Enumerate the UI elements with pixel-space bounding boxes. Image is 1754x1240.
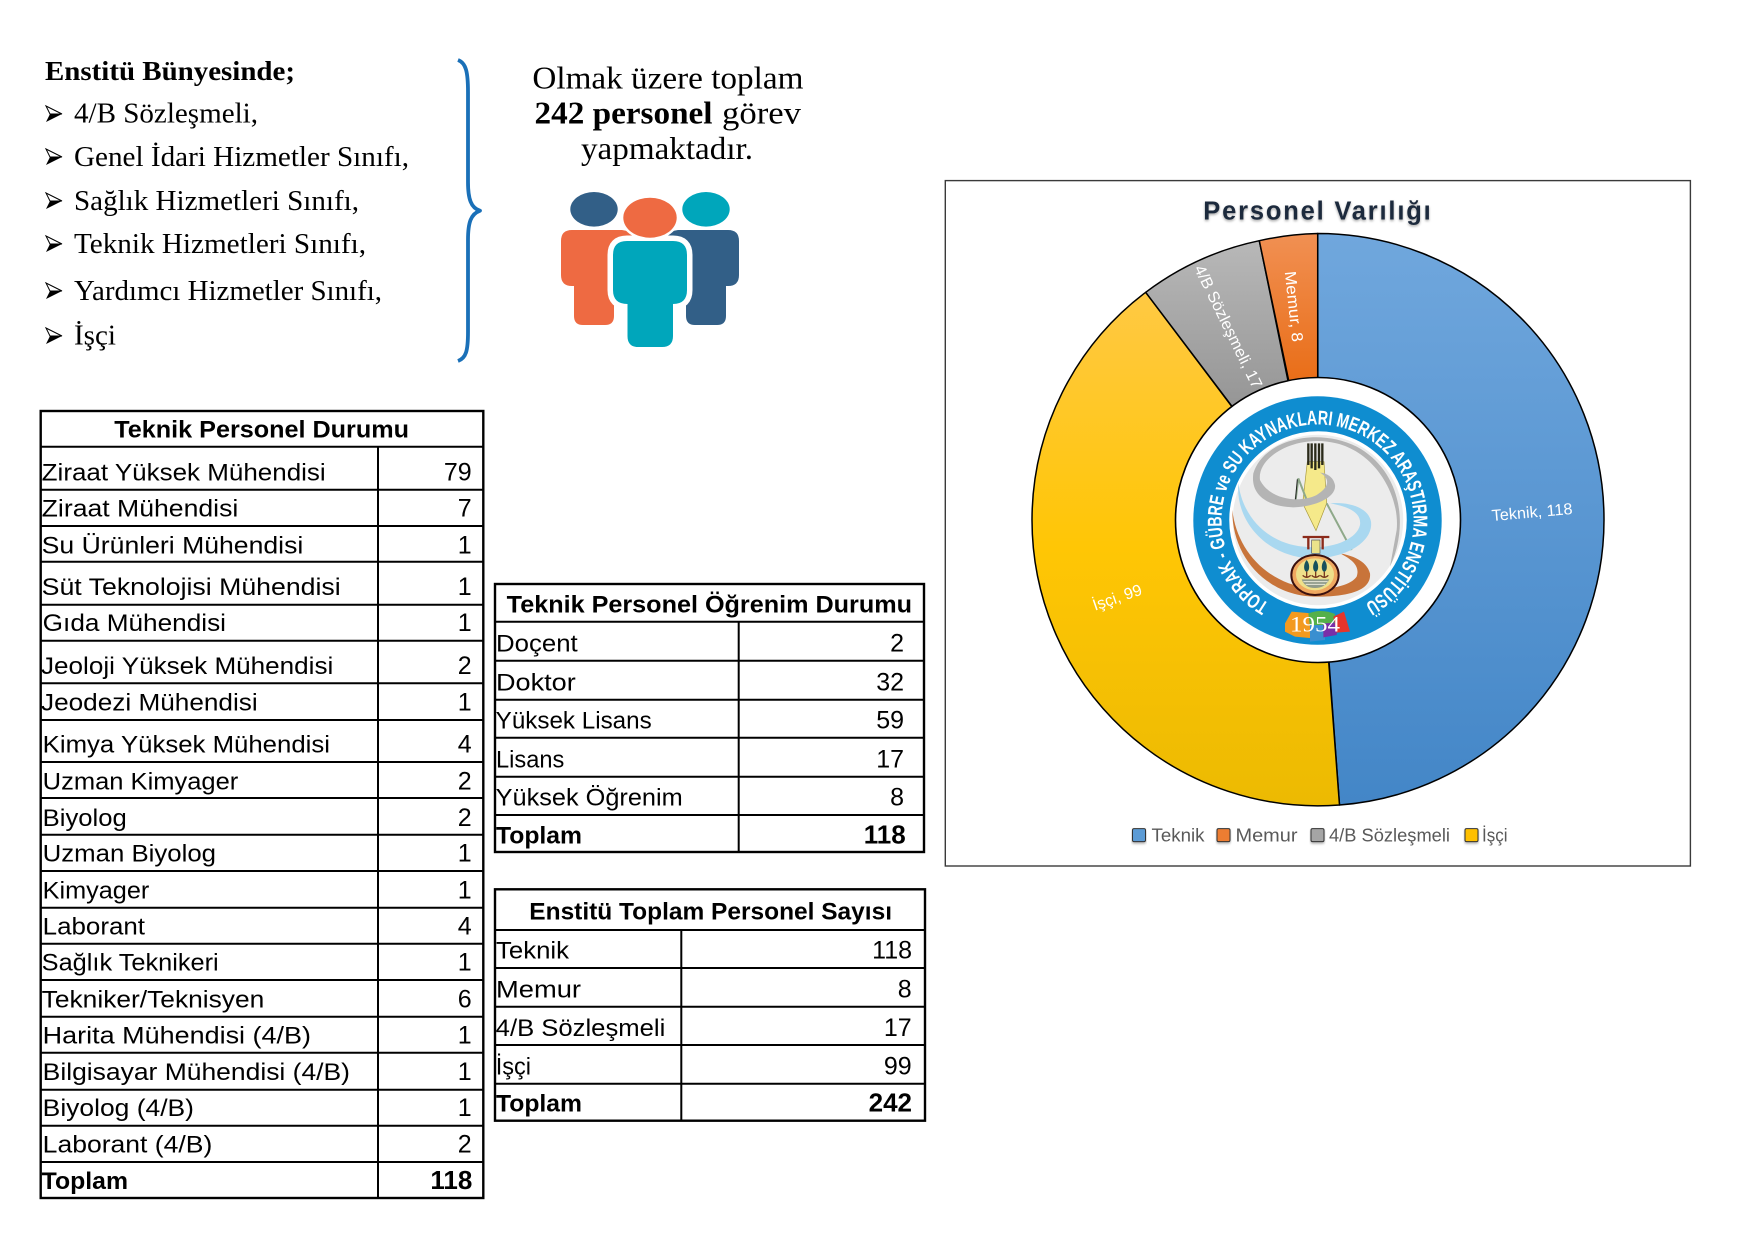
row: Uzman Kimyager: Uzman Kimyager: [43, 768, 238, 795]
row: Bilgisayar Mühendisi (4/B): [43, 1058, 472, 1086]
icon: curly brace: [458, 60, 480, 361]
logo ring text: TOPRAK - GÜBRE ve SU KAYNAKLARI MERKEZ ARAŞTIRMA ENSTİTÜSÜ: [1205, 410, 1428, 618]
list item: Genel İdari Hizmetler Sınıfı: Genel İdari Hizmetler Sınıfı,: [74, 142, 409, 173]
logo: coloured map with 1954: 1954: [1290, 612, 1340, 637]
row: İşçi: 99: [884, 1052, 912, 1080]
row: Kimya Yüksek Mühendisi: [43, 731, 472, 759]
row: Memur: Memur: [496, 977, 581, 1004]
row: Doktor: [496, 669, 904, 697]
row: Tekniker/Teknisyen: Tekniker/Teknisyen: [42, 986, 264, 1013]
row: Ziraat Mühendisi: [42, 495, 472, 523]
data label: Teknik, 118: Teknik, 118: [1491, 501, 1573, 525]
row: Doktor: 32: [876, 669, 904, 697]
row: Lisans: 17: [876, 745, 904, 773]
table: Teknik Personel Durumu: [41, 411, 483, 1198]
row: Laborant (4/B): 2: [458, 1131, 472, 1159]
row: Gıda Mühendisi: [43, 609, 472, 637]
row: Biyolog: [43, 804, 472, 832]
table heading: Teknik Personel Durumu: [114, 416, 409, 443]
row: Toplam: Toplam: [496, 1090, 582, 1118]
row: Lisans: [496, 745, 904, 773]
text block: total personnel statement: [532, 59, 804, 166]
row: Doçent: Doçent: [496, 631, 578, 658]
row: Teknik: [496, 937, 912, 965]
row: Su Ürünleri Mühendisi: [42, 531, 472, 559]
row: Yüksek Lisans: 59: [876, 706, 904, 734]
table: Enstitü Toplam Personel Sayısı: [495, 889, 925, 1121]
row: Laborant: 4: [458, 912, 472, 940]
row: Memur: [496, 976, 912, 1004]
text block: institute staff categories: [45, 56, 409, 352]
donut chart: [1032, 233, 1604, 806]
row: Biyolog: Biyolog: [43, 805, 127, 832]
row: Ziraat Mühendisi: 7: [458, 495, 472, 523]
row: Ziraat Yüksek Mühendisi: [42, 458, 472, 486]
legend item: İşçi: [1465, 825, 1508, 845]
row: Jeoloji Yüksek Mühendisi: [41, 652, 472, 680]
row: Sağlık Teknikeri: [42, 949, 472, 977]
row: Uzman Biyolog: 1: [458, 840, 472, 868]
row: Yüksek Öğrenim: [496, 784, 904, 812]
row: Harita Mühendisi (4/B): Harita Mühendisi (4/B): [43, 1023, 311, 1050]
row: 4/B Sözleşmeli: 17: [884, 1014, 912, 1042]
row: Jeoloji Yüksek Mühendisi: 2: [458, 652, 472, 680]
row: Toplam: Toplam: [496, 822, 582, 850]
legend item: Teknik: Teknik: [1152, 825, 1206, 845]
data label: İşçi, 99: İşçi, 99: [1090, 580, 1145, 615]
table heading: Enstitü Toplam Personel Sayısı: [529, 899, 892, 926]
row: Toplam: [496, 820, 906, 850]
slice: 4/B Sözleşmeli: [1146, 241, 1318, 520]
row: Kimya Yüksek Mühendisi: 4: [458, 731, 472, 759]
row: Jeodezi Mühendisi: 1: [458, 689, 472, 717]
row: İşçi: [496, 1052, 912, 1080]
row: Toplam: 242: [869, 1088, 912, 1118]
logo: coloured map with 1954: [1285, 611, 1350, 642]
panel: Personel Varlığı chart: [944, 180, 1692, 867]
row: 4/B Sözleşmeli: [496, 1014, 912, 1042]
row: Doçent: [496, 630, 904, 658]
data label: 4/B Sözleşmeli, 17: 4/B Sözleşmeli, 17: [1190, 263, 1265, 392]
row: Uzman Kimyager: 2: [458, 767, 472, 795]
list item: Yardımcı Hizmetler Sınıfı: Yardımcı Hizmetler Sınıfı,: [74, 276, 382, 307]
text block: total personnel statement: görev: [722, 94, 801, 130]
row: 4/B Sözleşmeli: 4/B Sözleşmeli: [496, 1015, 665, 1042]
row: Teknik: Teknik: [496, 938, 570, 965]
icon: three people: [561, 192, 739, 347]
row: Tekniker/Teknisyen: [42, 985, 472, 1013]
row: Biyolog (4/B): 1: [458, 1094, 472, 1122]
legend item: Memur: Memur: [1236, 825, 1298, 845]
row: Laborant (4/B): [43, 1131, 472, 1159]
row: İşçi: İşçi: [496, 1053, 531, 1080]
legend item: Memur: [1217, 825, 1298, 845]
row: Uzman Kimyager: [43, 767, 472, 795]
row: Kimyager: Kimyager: [43, 877, 149, 904]
logo artwork: swirls, wheat, medallion: [1232, 437, 1400, 597]
row: Toplam: [496, 1088, 912, 1118]
row: Bilgisayar Mühendisi (4/B): 1: [458, 1058, 472, 1086]
legend: [1132, 825, 1508, 845]
row: Su Ürünleri Mühendisi: 1: [458, 531, 472, 559]
row: Gıda Mühendisi: Gıda Mühendisi: [43, 610, 226, 637]
legend item: İşçi: İşçi: [1482, 825, 1508, 845]
list item: İşçi: [46, 321, 116, 352]
row: Toplam: 118: [430, 1165, 472, 1195]
row: Yüksek Öğrenim: Yüksek Öğrenim: [496, 785, 683, 812]
row: Kimya Yüksek Mühendisi: Kimya Yüksek Mühendisi: [43, 732, 330, 759]
row: Toplam: [42, 1165, 472, 1195]
list item: Sağlık Hizmetleri Sınıfı: Sağlık Hizmetleri Sınıfı,: [74, 186, 359, 217]
text block: total personnel statement: 242 personel: [534, 94, 713, 130]
text block: total personnel statement: Olmak üzere toplam: [532, 59, 804, 95]
row: Doktor: Doktor: [496, 670, 576, 697]
row: Biyolog (4/B): [43, 1094, 472, 1122]
list item: 4/B Sözleşmeli: 4/B Sözleşmeli,: [74, 99, 258, 130]
row: Doçent: 2: [890, 630, 904, 658]
row: Jeodezi Mühendisi: [41, 689, 472, 717]
list item: İşçi: İşçi: [74, 321, 116, 352]
row: Harita Mühendisi (4/B): 1: [458, 1022, 472, 1050]
row: Yüksek Lisans: Yüksek Lisans: [496, 707, 652, 734]
row: Memur: 8: [898, 976, 912, 1004]
row: Tekniker/Teknisyen: 6: [458, 985, 472, 1013]
data label: Memur, 8: Memur, 8: [1281, 270, 1305, 343]
row: Su Ürünleri Mühendisi: Su Ürünleri Mühendisi: [42, 532, 303, 559]
row: Gıda Mühendisi: 1: [458, 609, 472, 637]
row: Süt Teknolojisi Mühendisi: Süt Teknolojisi Mühendisi: [42, 574, 341, 601]
row: Ziraat Yüksek Mühendisi: 79: [444, 458, 472, 486]
heading: Enstitü Bünyesinde: Enstitü Bünyesinde;: [45, 56, 295, 86]
row: Yüksek Lisans: [496, 706, 904, 734]
row: Teknik: 118: [872, 937, 912, 965]
text block: total personnel statement: yapmaktadır.: [581, 130, 753, 166]
table: Teknik Personel Öğrenim Durumu: [495, 584, 924, 852]
slice: Memur: [1259, 234, 1318, 520]
chart title: Personel Varılığı: [1203, 197, 1431, 225]
row: Sağlık Teknikeri: Sağlık Teknikeri: [42, 950, 219, 977]
row: Jeodezi Mühendisi: Jeodezi Mühendisi: [41, 690, 258, 717]
row: Lisans: Lisans: [496, 746, 564, 773]
row: Laborant: Laborant: [43, 913, 145, 940]
list item: Teknik Hizmetleri Sınıfı: Teknik Hizmetleri Sınıfı,: [74, 229, 366, 260]
legend item: 4/B Sözleşmeli: 4/B Sözleşmeli: [1329, 825, 1450, 845]
row: Süt Teknolojisi Mühendisi: 1: [458, 573, 472, 601]
row: Jeoloji Yüksek Mühendisi: Jeoloji Yüksek Mühendisi: [41, 653, 333, 680]
row: Ziraat Yüksek Mühendisi: Ziraat Yüksek Mühendisi: [42, 459, 326, 486]
row: Süt Teknolojisi Mühendisi: [42, 573, 472, 601]
row: Yüksek Öğrenim: 8: [890, 784, 904, 812]
legend item: Teknik: [1132, 825, 1206, 845]
row: Uzman Biyolog: [43, 840, 472, 868]
slice: İşçi: [1032, 292, 1340, 806]
row: Toplam: Toplam: [42, 1168, 128, 1195]
logo: institute emblem: [1174, 376, 1462, 664]
row: Laborant (4/B): Laborant (4/B): [43, 1132, 212, 1159]
row: Harita Mühendisi (4/B): [43, 1022, 472, 1050]
row: Kimyager: [43, 876, 472, 904]
row: Kimyager: 1: [458, 876, 472, 904]
row: Biyolog: 2: [458, 804, 472, 832]
row: Sağlık Teknikeri: 1: [458, 949, 472, 977]
row: Toplam: 118: [864, 820, 906, 850]
row: Ziraat Mühendisi: Ziraat Mühendisi: [42, 496, 238, 523]
slice: Teknik: [1318, 233, 1604, 805]
row: Laborant: [43, 912, 472, 940]
table heading: Teknik Personel Öğrenim Durumu: [507, 591, 912, 618]
row: Biyolog (4/B): Biyolog (4/B): [43, 1095, 194, 1122]
row: Uzman Biyolog: Uzman Biyolog: [43, 841, 216, 868]
row: Bilgisayar Mühendisi (4/B): Bilgisayar Mühendisi (4/B): [43, 1059, 350, 1086]
